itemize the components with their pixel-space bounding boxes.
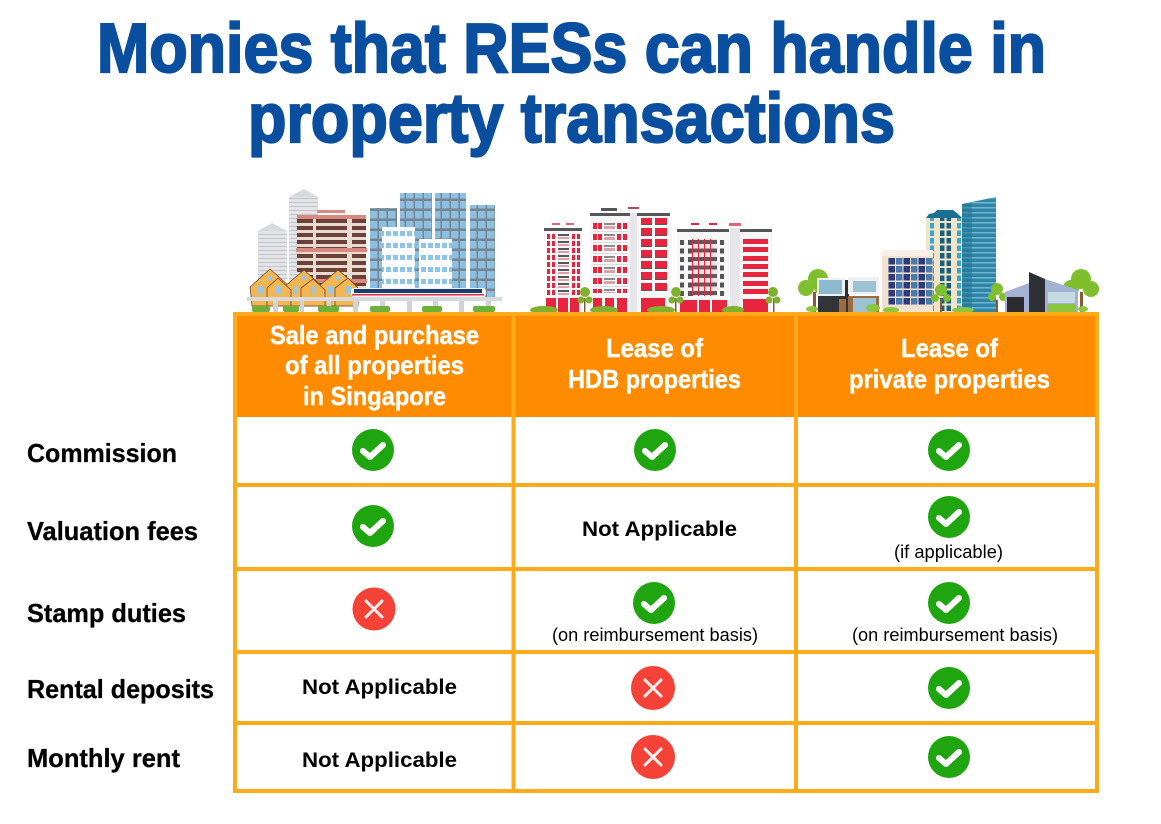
icon: tick, stamp duties, HDB	[633, 582, 675, 624]
table header band	[235, 314, 1097, 417]
illustration: city skyline with houses and train	[247, 189, 502, 312]
text: not applicable, monthly rent, sale: Not Applicable	[302, 749, 457, 772]
row labels: Commission	[27, 438, 177, 468]
train	[351, 288, 486, 297]
icon: tick, stamp duties, private	[928, 582, 970, 624]
column heading: sale and purchase: Sale and purchase	[270, 320, 479, 350]
title	[97, 9, 1046, 157]
text: not applicable, rental deposits, sale: Not Applicable	[302, 676, 457, 699]
icon: tick, commission, HDB	[634, 429, 676, 471]
row labels: Monthly rent	[27, 743, 180, 773]
icon: cross, rental deposits, HDB	[631, 666, 675, 710]
icon: tick, monthly rent, private	[928, 736, 970, 778]
column heading: lease of private properties: Lease of	[901, 333, 998, 363]
illustration: private properties	[798, 197, 1099, 313]
icon: tick, rental deposits, private	[928, 667, 970, 709]
column heading: lease of private properties	[849, 333, 1050, 394]
note: if applicable: (if applicable)	[894, 542, 1003, 562]
title: Monies that RESs can handle in	[97, 9, 1046, 87]
icon: cross, stamp duties, sale	[352, 588, 396, 630]
column heading: sale and purchase: of all properties	[285, 350, 464, 380]
icon: tick, commission, private	[928, 429, 970, 471]
houses	[250, 269, 358, 306]
modern house left	[817, 277, 879, 312]
note: on reimbursement basis, private: (on reimbursement basis)	[852, 625, 1058, 645]
column heading: sale and purchase	[270, 320, 479, 411]
icon: cross, monthly rent, HDB	[631, 735, 675, 779]
icon: tick, valuation, sale	[352, 505, 394, 547]
column heading: sale and purchase: in Singapore	[303, 381, 446, 411]
row labels	[27, 438, 214, 773]
column heading: lease of HDB properties: Lease of	[606, 333, 703, 363]
column heading: lease of private properties: private properties	[849, 364, 1050, 394]
row labels: Rental deposits	[27, 674, 214, 704]
note: on reimbursement basis, HDB: (on reimbursement basis)	[552, 625, 758, 645]
table	[235, 314, 1097, 791]
icon: tick, commission, sale	[352, 429, 394, 471]
column heading: lease of HDB properties: HDB properties	[568, 364, 741, 394]
row labels: Stamp duties	[27, 598, 186, 628]
title: property transactions	[248, 79, 895, 157]
column heading: lease of HDB properties	[568, 333, 741, 394]
icon: tick, valuation, private	[928, 496, 970, 538]
text: not applicable, valuation, HDB: Not Applicable	[582, 518, 737, 541]
illustration: HDB flats	[530, 207, 780, 314]
row labels: Valuation fees	[27, 516, 198, 546]
